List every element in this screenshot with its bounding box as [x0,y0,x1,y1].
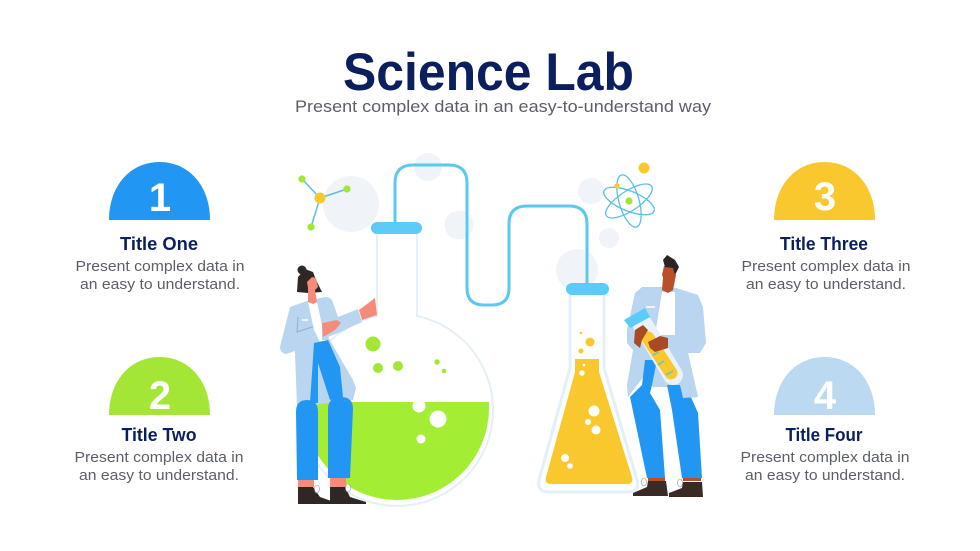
icon: yellow semicircle with number 3 [774,162,875,220]
subtitle: Present complex data in an easy-to-understand way [295,97,712,116]
heading: title three: Title Three [780,234,868,254]
scientist: man [624,255,706,497]
round flask with green liquid [301,222,493,506]
icon: pale blue semicircle with number 4: 4 [814,374,837,418]
text: description three: Present complex data in [742,258,910,275]
title: Science Lab [343,43,634,102]
text: description one: Present complex data in [76,258,244,275]
icon: green semicircle with number 2: 2 [149,374,171,418]
panel: title four [740,357,910,484]
text: description one: an easy to understand. [80,276,240,293]
heading: title four: Title Four [786,425,862,445]
icon: atom [600,162,658,230]
icon: blue semicircle with number 1 [109,162,210,220]
background bubbles [323,153,619,291]
scientist: woman [280,266,377,504]
panel: title three [742,162,910,293]
connecting tube [395,165,587,305]
icon: blue semicircle with number 1: 1 [149,176,171,220]
panel: title one [76,162,244,293]
heading: title one: Title One [120,234,198,254]
text: description two: an easy to understand. [79,467,239,484]
icon: pale blue semicircle with number 4 [774,357,875,418]
icon: molecule [298,175,351,231]
text: description four: an easy to understand. [745,467,905,484]
conical flask with yellow liquid [539,283,638,492]
icon: yellow semicircle with number 3: 3 [814,175,836,219]
panel: title two [74,357,244,484]
text: description three: an easy to understand. [746,276,906,293]
text: description two: Present complex data in [74,449,244,466]
icon: green semicircle with number 2 [109,357,210,418]
test tube [624,308,673,375]
text: description four: Present complex data in [740,449,910,466]
heading: title two: Title Two [122,425,196,445]
